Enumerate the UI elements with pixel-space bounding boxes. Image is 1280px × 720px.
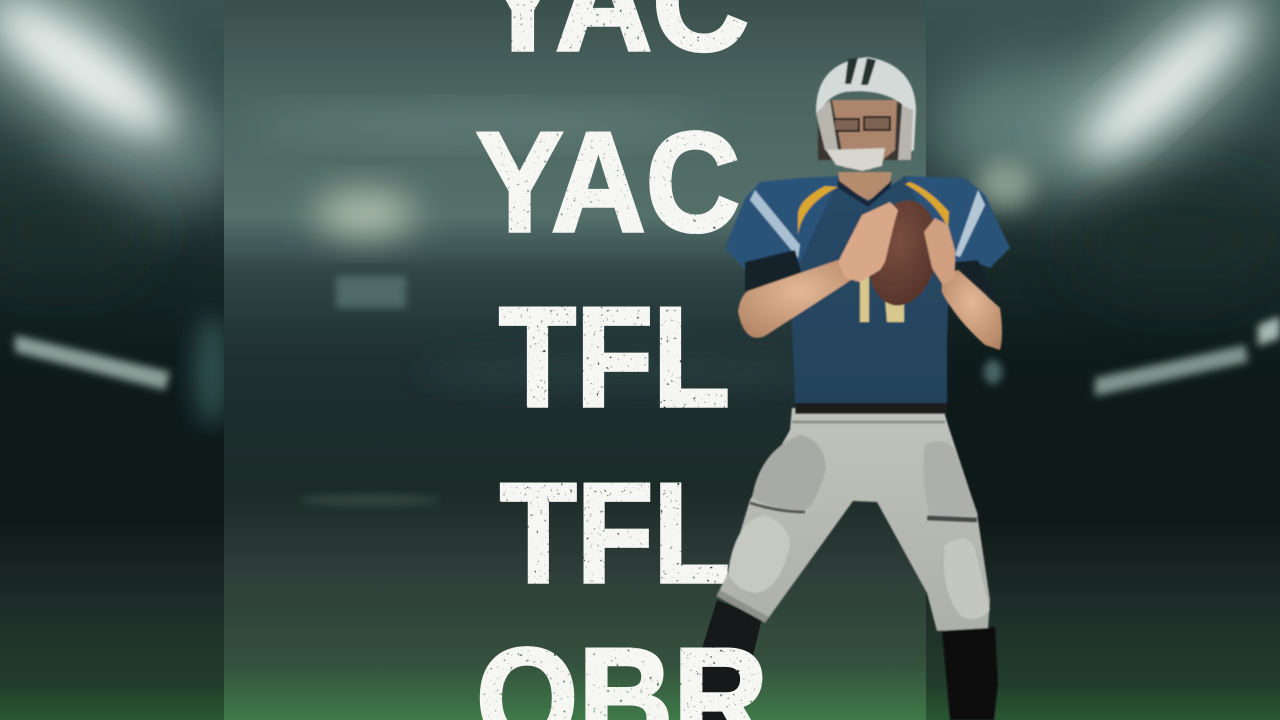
helmet side speckle	[816, 100, 913, 160]
yellow shoulder stripes	[798, 186, 838, 235]
left arm	[738, 260, 862, 338]
jersey torso	[792, 176, 950, 403]
undershirt sleeves	[745, 250, 802, 293]
helmet stripes	[845, 58, 876, 85]
hands	[838, 202, 898, 282]
right sock	[942, 627, 998, 720]
lettering: stat abbreviations	[476, 0, 768, 720]
helmet shell	[816, 57, 916, 155]
pants	[718, 408, 990, 631]
abbreviation: TFL, second row: TFL	[500, 454, 730, 613]
helmet interior	[818, 100, 912, 160]
jersey number	[860, 272, 904, 322]
stadium background, right panel	[926, 0, 1280, 720]
football	[860, 195, 946, 311]
left sleeve	[725, 176, 840, 270]
neck and collar	[838, 172, 892, 200]
glasses	[834, 117, 890, 131]
abbreviation: TFL: TFL	[499, 278, 730, 437]
stadium background, left panel	[0, 0, 240, 720]
football player	[718, 57, 1010, 720]
player: left sock, behind lettering	[680, 600, 762, 720]
face mask	[826, 148, 885, 171]
belt	[795, 402, 947, 414]
face	[832, 100, 897, 170]
right arm	[942, 270, 1002, 350]
abbreviation: YAC: YAC	[476, 103, 740, 262]
right sleeve	[905, 176, 1010, 268]
sleeve stripes	[750, 190, 800, 258]
translucent centre panel	[224, 0, 926, 720]
